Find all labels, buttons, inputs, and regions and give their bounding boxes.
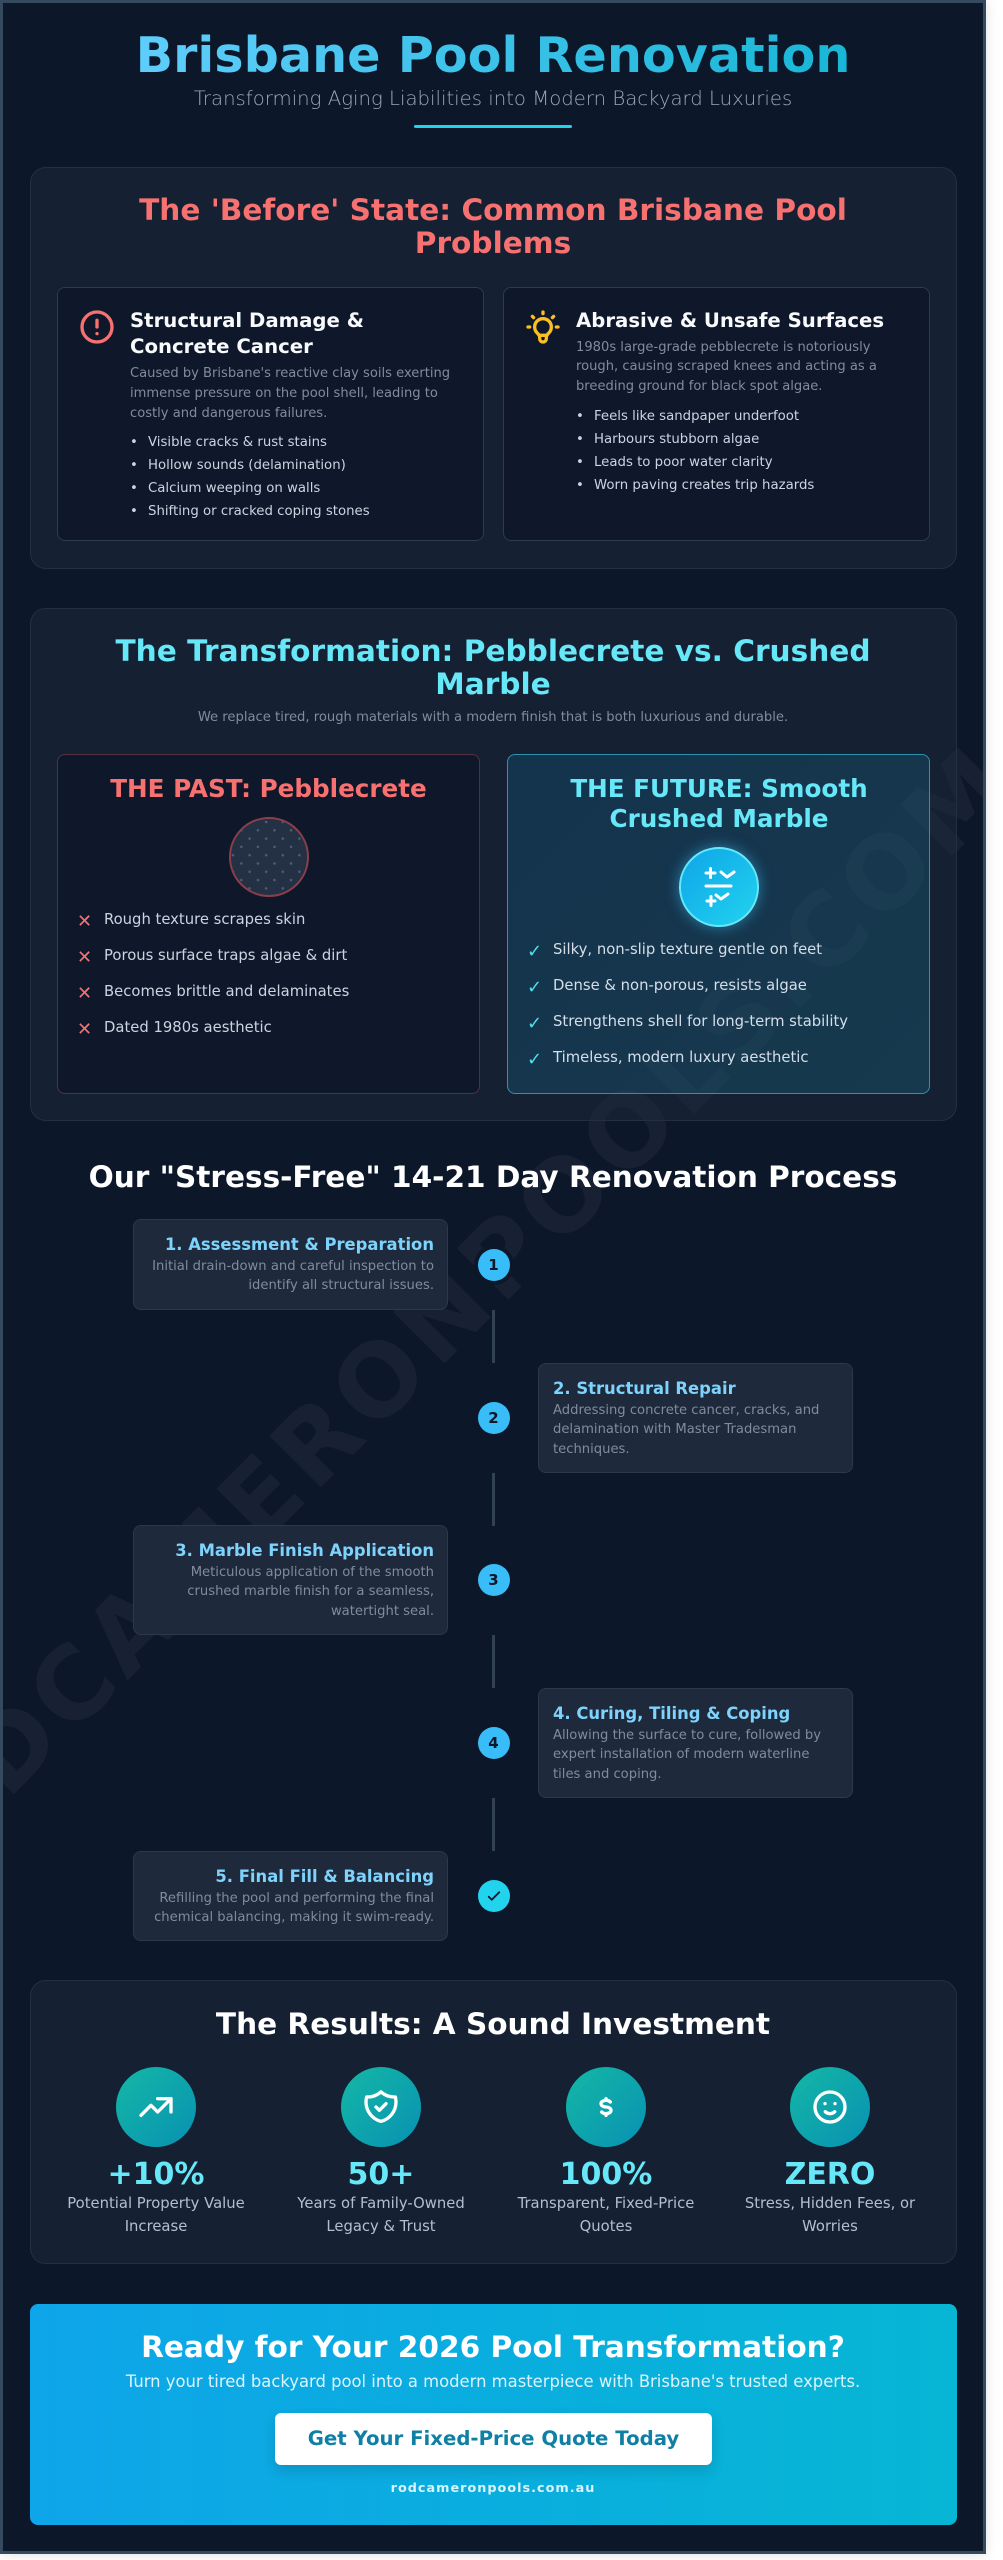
stat value: 50+ bbox=[348, 2157, 414, 2192]
step marker 2 bbox=[478, 1402, 510, 1434]
step description bbox=[553, 1402, 819, 1457]
past list bbox=[104, 911, 349, 1036]
problem list: • bbox=[130, 504, 138, 519]
past heading: THE PAST: Pebblecrete bbox=[110, 774, 427, 803]
card title bbox=[130, 308, 364, 358]
stat label bbox=[745, 2195, 916, 2235]
check markers bbox=[527, 941, 542, 1070]
header bbox=[136, 26, 850, 128]
stat: family legacy bbox=[297, 2067, 465, 2235]
stat: fixed price bbox=[518, 2067, 694, 2235]
stat value: 100% bbox=[560, 2157, 652, 2192]
card description: immense pressure on the pool shell, leading to bbox=[130, 386, 438, 401]
problem list: Shifting or cracked coping stones bbox=[148, 504, 370, 519]
future list: Dense & non-porous, resists algae bbox=[553, 977, 807, 994]
heading: transformation bbox=[115, 634, 871, 701]
icon: alert circle bbox=[80, 310, 114, 344]
icon: shield check bbox=[341, 2067, 421, 2147]
future list: Strengthens shell for long-term stability bbox=[553, 1013, 848, 1030]
stat label: Quotes bbox=[580, 2218, 632, 2235]
icon: trending up bbox=[116, 2067, 196, 2147]
stat: property value bbox=[67, 2067, 245, 2235]
card description: rough, causing scraped knees and acting as a bbox=[576, 359, 877, 374]
problem list: Harbours stubborn algae bbox=[594, 432, 759, 447]
cta heading: Ready for Your 2026 Pool Transformation? bbox=[141, 2330, 845, 2364]
step description: Addressing concrete cancer, cracks, and bbox=[553, 1402, 819, 1418]
heading: before state: Problems bbox=[415, 226, 571, 260]
step title: 3. Marble Finish Application bbox=[175, 1541, 434, 1560]
past list: Dated 1980s aesthetic bbox=[104, 1019, 272, 1036]
step description: chemical balancing, making it swim-ready. bbox=[154, 1910, 434, 1925]
card description: 1980s large-grade pebblecrete is notoriously bbox=[576, 340, 870, 354]
card: the future bbox=[507, 754, 930, 1094]
step marker 1 bbox=[478, 1248, 510, 1280]
step marker 5 bbox=[478, 1880, 510, 1912]
step 1 bbox=[133, 1219, 448, 1310]
accent line bbox=[414, 125, 572, 128]
stat label bbox=[297, 2195, 465, 2235]
future heading: THE FUTURE: Smooth bbox=[570, 774, 868, 803]
stat label bbox=[67, 2195, 245, 2235]
step title: 5. Final Fill & Balancing bbox=[215, 1867, 434, 1886]
panel: transformation bbox=[30, 608, 957, 1121]
title: Brisbane Pool Renovation bbox=[136, 26, 850, 84]
call to action bbox=[30, 2304, 957, 2525]
problem list: Visible cracks & rust stains bbox=[148, 435, 327, 450]
heading: results: The Results: A Sound Investment bbox=[216, 2007, 770, 2041]
problem list: • bbox=[130, 435, 138, 450]
panel: results bbox=[30, 1980, 957, 2264]
cta button: Get Your Fixed-Price Quote Today bbox=[308, 2427, 679, 2450]
step description: Allowing the surface to cure, followed by bbox=[553, 1728, 821, 1742]
card description: breeding ground for black spot algae. bbox=[576, 379, 822, 394]
future list bbox=[552, 941, 848, 1066]
card: structural damage bbox=[57, 287, 484, 541]
stat label bbox=[518, 2195, 694, 2235]
stat: zero stress bbox=[745, 2067, 916, 2235]
step marker 2: 2 bbox=[488, 1409, 499, 1427]
step description: watertight seal. bbox=[331, 1604, 434, 1619]
transformation intro: We replace tired, rough materials with a modern finish that is both luxurious and durable. bbox=[198, 710, 788, 725]
problem list: • bbox=[576, 478, 584, 493]
step 3 bbox=[133, 1525, 448, 1635]
problem list bbox=[130, 435, 370, 519]
check markers: ✓ bbox=[527, 1013, 542, 1034]
stat label: Transparent, Fixed-Price bbox=[518, 2195, 694, 2212]
problem list: • bbox=[576, 432, 584, 447]
card description: Caused by Brisbane's reactive clay soils exerting bbox=[130, 366, 450, 381]
check markers: ✓ bbox=[527, 1049, 542, 1070]
website url: rodcameronpools.com.au bbox=[391, 2481, 595, 2496]
stat label: Potential Property Value bbox=[67, 2195, 245, 2212]
heading: process: Our "Stress-Free" 14-21 Day Renovation Process bbox=[89, 1160, 897, 1194]
step marker 3 bbox=[478, 1564, 510, 1596]
step description: tiles and coping. bbox=[553, 1767, 662, 1782]
step marker 1: 1 bbox=[488, 1256, 499, 1274]
stat value: +10% bbox=[108, 2157, 204, 2192]
check markers: ✓ bbox=[527, 941, 542, 962]
timeline connectors bbox=[492, 1310, 495, 1851]
step description: Initial drain-down and careful inspection to bbox=[152, 1258, 434, 1274]
stat label: Stress, Hidden Fees, or bbox=[745, 2195, 915, 2212]
step title: 1. Assessment & Preparation bbox=[165, 1235, 434, 1254]
icon: smile bbox=[790, 2067, 870, 2147]
problem list bbox=[576, 409, 814, 493]
stat label: Increase bbox=[125, 2218, 187, 2235]
icon: light bulb bbox=[526, 310, 560, 344]
step marker 4 bbox=[478, 1727, 510, 1759]
step title: 4. Curing, Tiling & Coping bbox=[553, 1704, 790, 1723]
problem list: • bbox=[576, 409, 584, 424]
card title: Concrete Cancer bbox=[130, 334, 313, 358]
stat label: Years of Family-Owned bbox=[297, 2195, 465, 2212]
heading: transformation: Marble bbox=[435, 667, 551, 701]
step 5 bbox=[133, 1851, 448, 1941]
past list: Porous surface traps algae & dirt bbox=[104, 947, 347, 964]
heading: before state: The 'Before' State: Common Brisbane Pool bbox=[139, 193, 847, 227]
problem list: • bbox=[576, 455, 584, 470]
problem list: Leads to poor water clarity bbox=[594, 455, 773, 470]
cross markers: ✕ bbox=[77, 1019, 92, 1040]
stat label: Legacy & Trust bbox=[326, 2218, 436, 2235]
problem list: • bbox=[130, 458, 138, 473]
step description bbox=[553, 1728, 821, 1782]
card title: Abrasive & Unsafe Surfaces bbox=[576, 308, 884, 332]
step description bbox=[187, 1564, 434, 1619]
step description: Refilling the pool and performing the final bbox=[159, 1890, 434, 1906]
step 2 bbox=[538, 1363, 853, 1473]
cross markers bbox=[77, 911, 92, 1040]
marble swatch bbox=[679, 847, 759, 927]
problem list: Hollow sounds (delamination) bbox=[148, 458, 346, 473]
step title: 2. Structural Repair bbox=[553, 1379, 736, 1398]
cross markers: ✕ bbox=[77, 911, 92, 932]
card: abrasive surfaces bbox=[503, 287, 930, 541]
future list: Timeless, modern luxury aesthetic bbox=[553, 1049, 808, 1066]
heading: transformation: The Transformation: Pebblecrete vs. Crushed bbox=[115, 634, 871, 668]
icon: dollar bbox=[566, 2067, 646, 2147]
step marker 4: 4 bbox=[488, 1734, 499, 1752]
card description bbox=[130, 366, 450, 421]
icon: marble sparkle bbox=[704, 867, 736, 907]
check markers: ✓ bbox=[527, 977, 542, 998]
cross markers: ✕ bbox=[77, 983, 92, 1004]
stat label: Worries bbox=[802, 2218, 858, 2235]
subtitle: Transforming Aging Liabilities into Modern Backyard Luxuries bbox=[194, 87, 792, 110]
future heading: Crushed Marble bbox=[609, 804, 828, 833]
step marker 3: 3 bbox=[488, 1571, 499, 1589]
card: the past bbox=[57, 754, 480, 1094]
panel: before state bbox=[30, 167, 957, 569]
step description bbox=[154, 1890, 434, 1925]
cross markers: ✕ bbox=[77, 947, 92, 968]
cta text: Turn your tired backyard pool into a modern masterpiece with Brisbane's trusted experts. bbox=[126, 2372, 860, 2391]
icon: check bbox=[488, 1891, 500, 1901]
step description: identify all structural issues. bbox=[248, 1278, 434, 1293]
step description: expert installation of modern waterline bbox=[553, 1747, 809, 1762]
step 4 bbox=[538, 1688, 853, 1798]
card description bbox=[576, 340, 877, 394]
past list: Becomes brittle and delaminates bbox=[104, 983, 349, 1000]
problem list: Feels like sandpaper underfoot bbox=[594, 409, 799, 424]
pebblecrete swatch bbox=[229, 817, 309, 897]
future heading bbox=[570, 774, 868, 833]
card description: costly and dangerous failures. bbox=[130, 406, 327, 421]
past list: Rough texture scrapes skin bbox=[104, 911, 305, 928]
step description bbox=[152, 1258, 434, 1293]
step description: techniques. bbox=[553, 1442, 630, 1457]
card title: Structural Damage & bbox=[130, 308, 364, 332]
future list: Silky, non-slip texture gentle on feet bbox=[553, 941, 822, 958]
step description: Meticulous application of the smooth bbox=[191, 1564, 434, 1580]
problem list: Worn paving creates trip hazards bbox=[594, 478, 814, 493]
problem list: • bbox=[130, 481, 138, 496]
problem list: Calcium weeping on walls bbox=[148, 481, 320, 496]
heading: before state bbox=[139, 193, 847, 260]
cta button bbox=[275, 2413, 712, 2465]
step description: crushed marble finish for a seamless, bbox=[187, 1584, 434, 1599]
stat value: ZERO bbox=[785, 2157, 875, 2192]
step description: delamination with Master Tradesman bbox=[553, 1422, 796, 1437]
